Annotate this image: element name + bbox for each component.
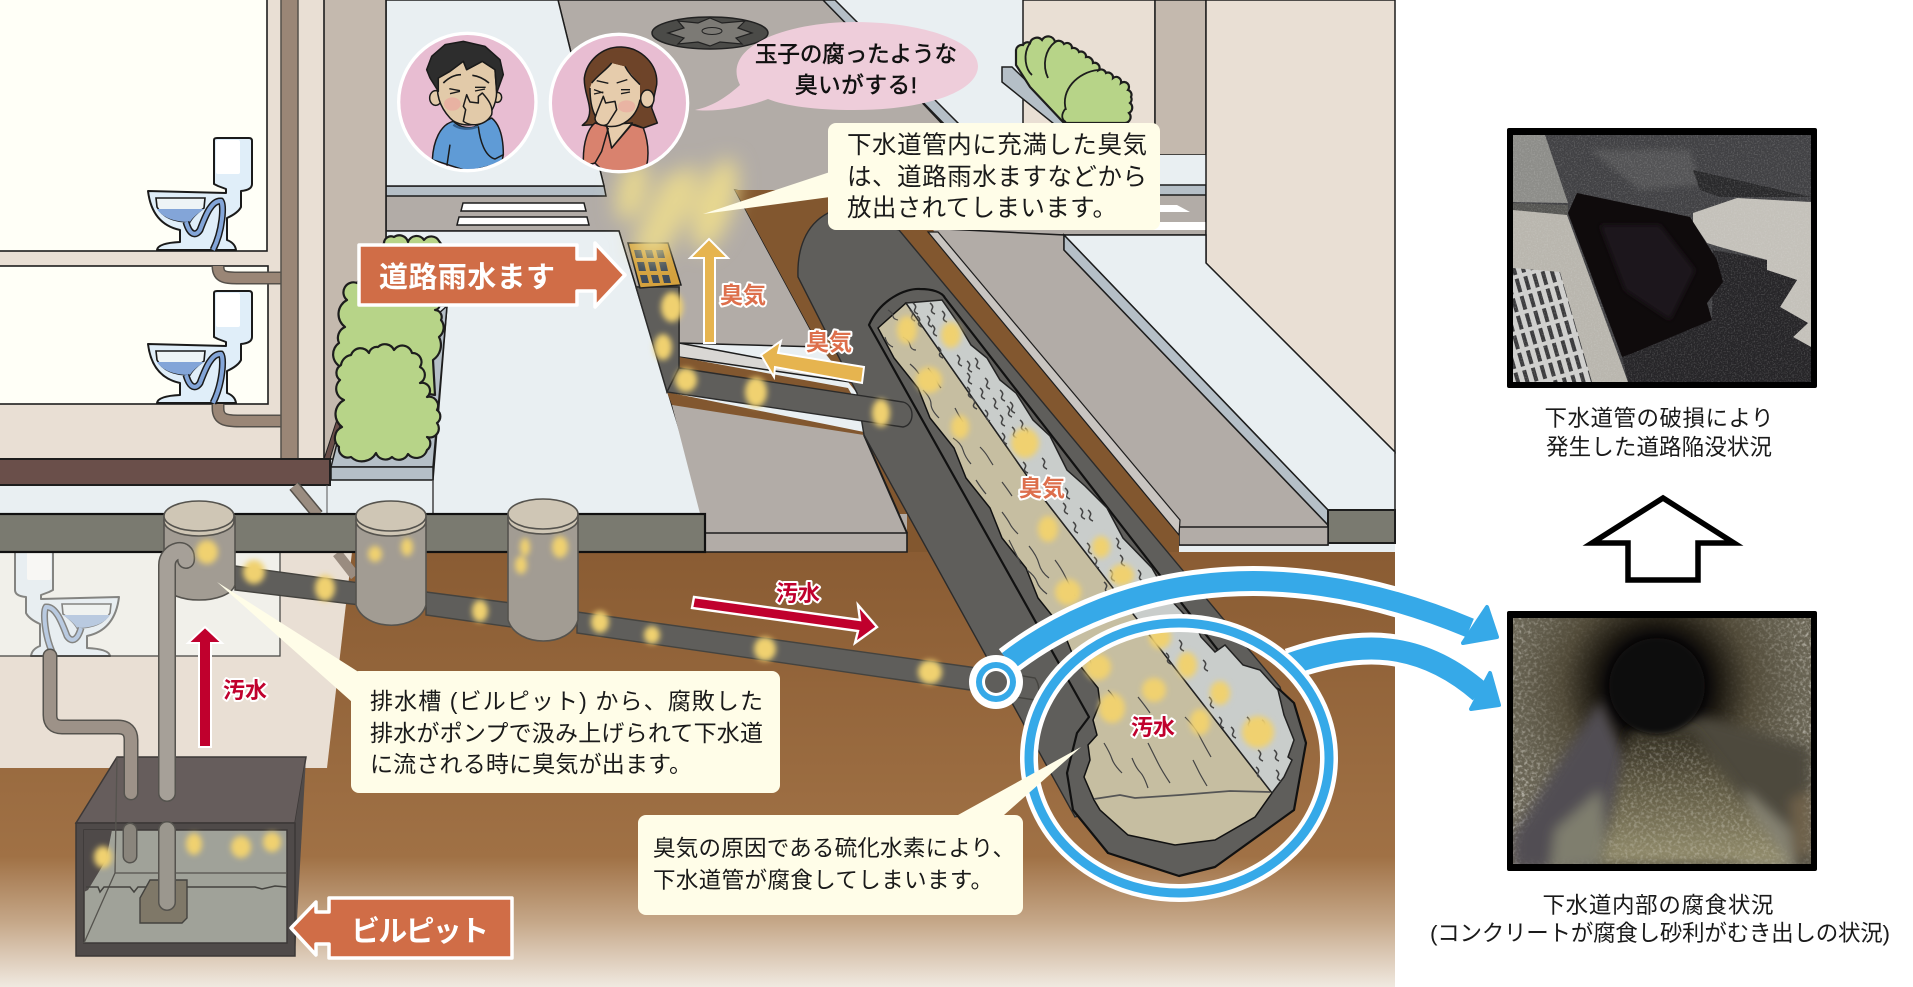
background scene	[0, 0, 1395, 987]
blue arrow to pipe photo	[1008, 581, 1470, 661]
callout: odor released: は、道路雨水ますなどから	[847, 163, 1147, 191]
toilet upper floor	[148, 138, 252, 250]
trench soil	[735, 190, 1179, 552]
corroded pipe wall	[906, 300, 1294, 793]
up arrow	[1592, 498, 1734, 580]
photo: pipe corrosion	[1507, 611, 1817, 871]
detail circle	[1029, 623, 1329, 893]
callout: pit pump: 排水槽 (ビルピット) から、腐敗した	[370, 688, 763, 714]
crosswalk stripes	[457, 203, 589, 225]
callout: pit pump	[217, 582, 780, 793]
wall gravel marks	[910, 303, 1281, 781]
photo: road collapse	[1507, 128, 1817, 388]
caption: road collapse: 発生した道路陥没状況	[1546, 435, 1772, 460]
sewage label pit: 汚水	[223, 678, 267, 703]
bush near planter	[333, 235, 444, 461]
odor plume	[610, 154, 747, 262]
cutaway pipe	[869, 289, 1306, 876]
sewage label pipe: 汚水	[776, 581, 820, 606]
speech bubble	[695, 22, 978, 111]
drain pipe from toilet	[50, 656, 131, 856]
callout: hydrogen sulfide: 臭気の原因である硫化水素により、	[653, 836, 1015, 861]
shaft under storm drain	[636, 287, 679, 392]
ground soil	[0, 552, 1395, 987]
storm drain grate	[628, 243, 681, 288]
callout: pit pump: 排水がポンプで汲み上げられて下水道	[370, 720, 763, 746]
odor label three: 臭気	[1019, 475, 1065, 501]
building pit label	[291, 898, 512, 958]
blue arrow heads	[1463, 607, 1499, 709]
callout: odor released	[703, 123, 1160, 230]
road curb strip	[928, 232, 1180, 535]
odor arrow up	[690, 239, 728, 343]
speech bubble: 玉子の腐ったような	[755, 42, 957, 67]
callout: hydrogen sulfide	[638, 747, 1081, 915]
callout: pit pump: に流される時に臭気が出ます。	[370, 751, 692, 777]
odor label one: 臭気	[720, 282, 766, 308]
callout: odor released: 放出されてしまいます。	[847, 194, 1117, 222]
building pit	[76, 757, 306, 956]
odor label two: 臭気	[806, 329, 852, 355]
manhole cover	[652, 17, 768, 49]
man holding nose	[397, 32, 538, 172]
caption: road collapse	[1544, 406, 1774, 460]
sewage water surface	[878, 303, 1272, 845]
far sidewalk curb	[823, 0, 1005, 176]
sewer lateral pipes	[235, 566, 1039, 700]
sewage label cutaway: 汚水	[1131, 715, 1175, 740]
left building	[0, 0, 386, 459]
manhole one	[164, 501, 235, 600]
odor arrow left	[761, 341, 864, 383]
manhole three	[508, 499, 578, 641]
road surface	[386, 0, 1206, 347]
right building wall	[1000, 0, 1395, 452]
caption: pipe corrosion	[1430, 893, 1890, 946]
planter and foundation	[0, 306, 447, 485]
ground level strip	[0, 480, 705, 576]
water ripples	[885, 310, 1211, 788]
callout: hydrogen sulfide: 下水道管が腐食してしまいます。	[653, 868, 993, 893]
speech bubble: 臭いがする!	[795, 73, 917, 98]
near sidewalk curb	[386, 186, 606, 196]
basement wall	[0, 552, 352, 768]
caption: road collapse: 下水道管の破損により	[1544, 406, 1774, 431]
odor blobs	[94, 292, 1274, 868]
sewage arrow right	[692, 597, 877, 643]
blue arrow to pipe photo lower	[1290, 649, 1480, 692]
main sewer trench	[798, 213, 1300, 817]
source ring	[969, 655, 1023, 709]
near sidewalk	[386, 0, 604, 186]
water level line	[1094, 791, 1270, 799]
woman holding nose	[549, 33, 689, 175]
far planter with bush	[1002, 36, 1132, 132]
right road and sidewalk	[925, 228, 1395, 545]
building pit label: ビルピット	[351, 915, 489, 948]
basement toilet	[15, 544, 119, 656]
side road block	[667, 343, 907, 552]
pump	[140, 880, 187, 923]
sewage arrow up	[188, 627, 222, 747]
lower sidewalk	[386, 231, 705, 514]
road drain label: 道路雨水ます	[379, 261, 555, 294]
manhole two	[356, 501, 426, 625]
side pipe	[667, 368, 912, 427]
road drain label	[359, 243, 625, 307]
pump riser pipe	[167, 551, 186, 902]
toilet second floor	[148, 291, 252, 403]
caption: pipe corrosion: (コンクリートが腐食し砂利がむき出しの状況)	[1430, 921, 1890, 946]
callout: odor released: 下水道管内に充満した臭気	[847, 131, 1147, 159]
caption: pipe corrosion: 下水道内部の腐食状況	[1542, 893, 1774, 918]
